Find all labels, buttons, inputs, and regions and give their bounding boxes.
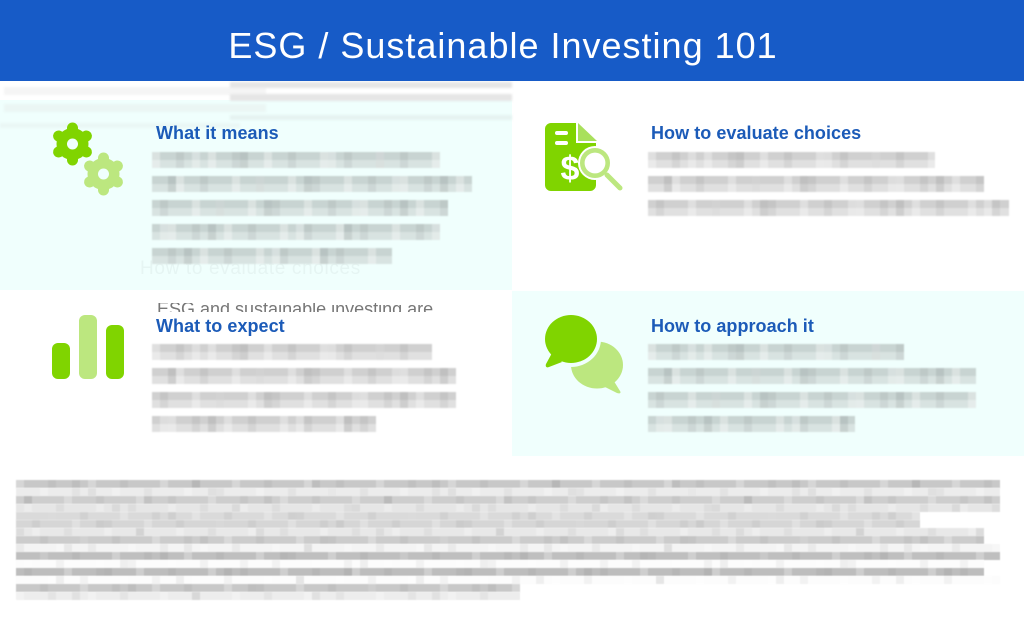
header banner <box>0 0 1024 81</box>
panel: what to expect <box>52 315 456 432</box>
heading: What it means <box>156 123 279 143</box>
icon: document with dollar sign and magnifier: $ <box>561 150 580 188</box>
obscured body text, drawn as a mosaic <box>648 151 1010 216</box>
heading: How to evaluate choices <box>651 123 861 143</box>
obscured body text, drawn as a mosaic <box>648 343 976 432</box>
ghost heading: how to evaluate choices: How to evaluate choices <box>140 258 361 279</box>
icon: speech bubbles <box>545 315 623 394</box>
panel: what it means background <box>0 100 512 290</box>
obscured body text, drawn as a mosaic <box>152 343 456 432</box>
panel: how to evaluate choices <box>545 123 1010 216</box>
icon: gears <box>53 122 123 196</box>
panel: how to approach it background <box>512 291 1024 456</box>
panel: how to approach it <box>545 315 976 432</box>
obscured body text, drawn as a mosaic <box>152 151 472 264</box>
panel: what it means <box>53 122 472 264</box>
icon: document with dollar sign and magnifier <box>545 123 622 191</box>
heading: What to expect <box>156 316 285 336</box>
faint ghost text rows at top <box>5 82 512 120</box>
icon: bar chart <box>52 315 124 379</box>
heading: How to approach it <box>651 316 814 336</box>
footer disclosure, obscured, drawn as a mosaic <box>16 480 1000 600</box>
title: ESG / Sustainable Investing 101 <box>228 25 778 66</box>
